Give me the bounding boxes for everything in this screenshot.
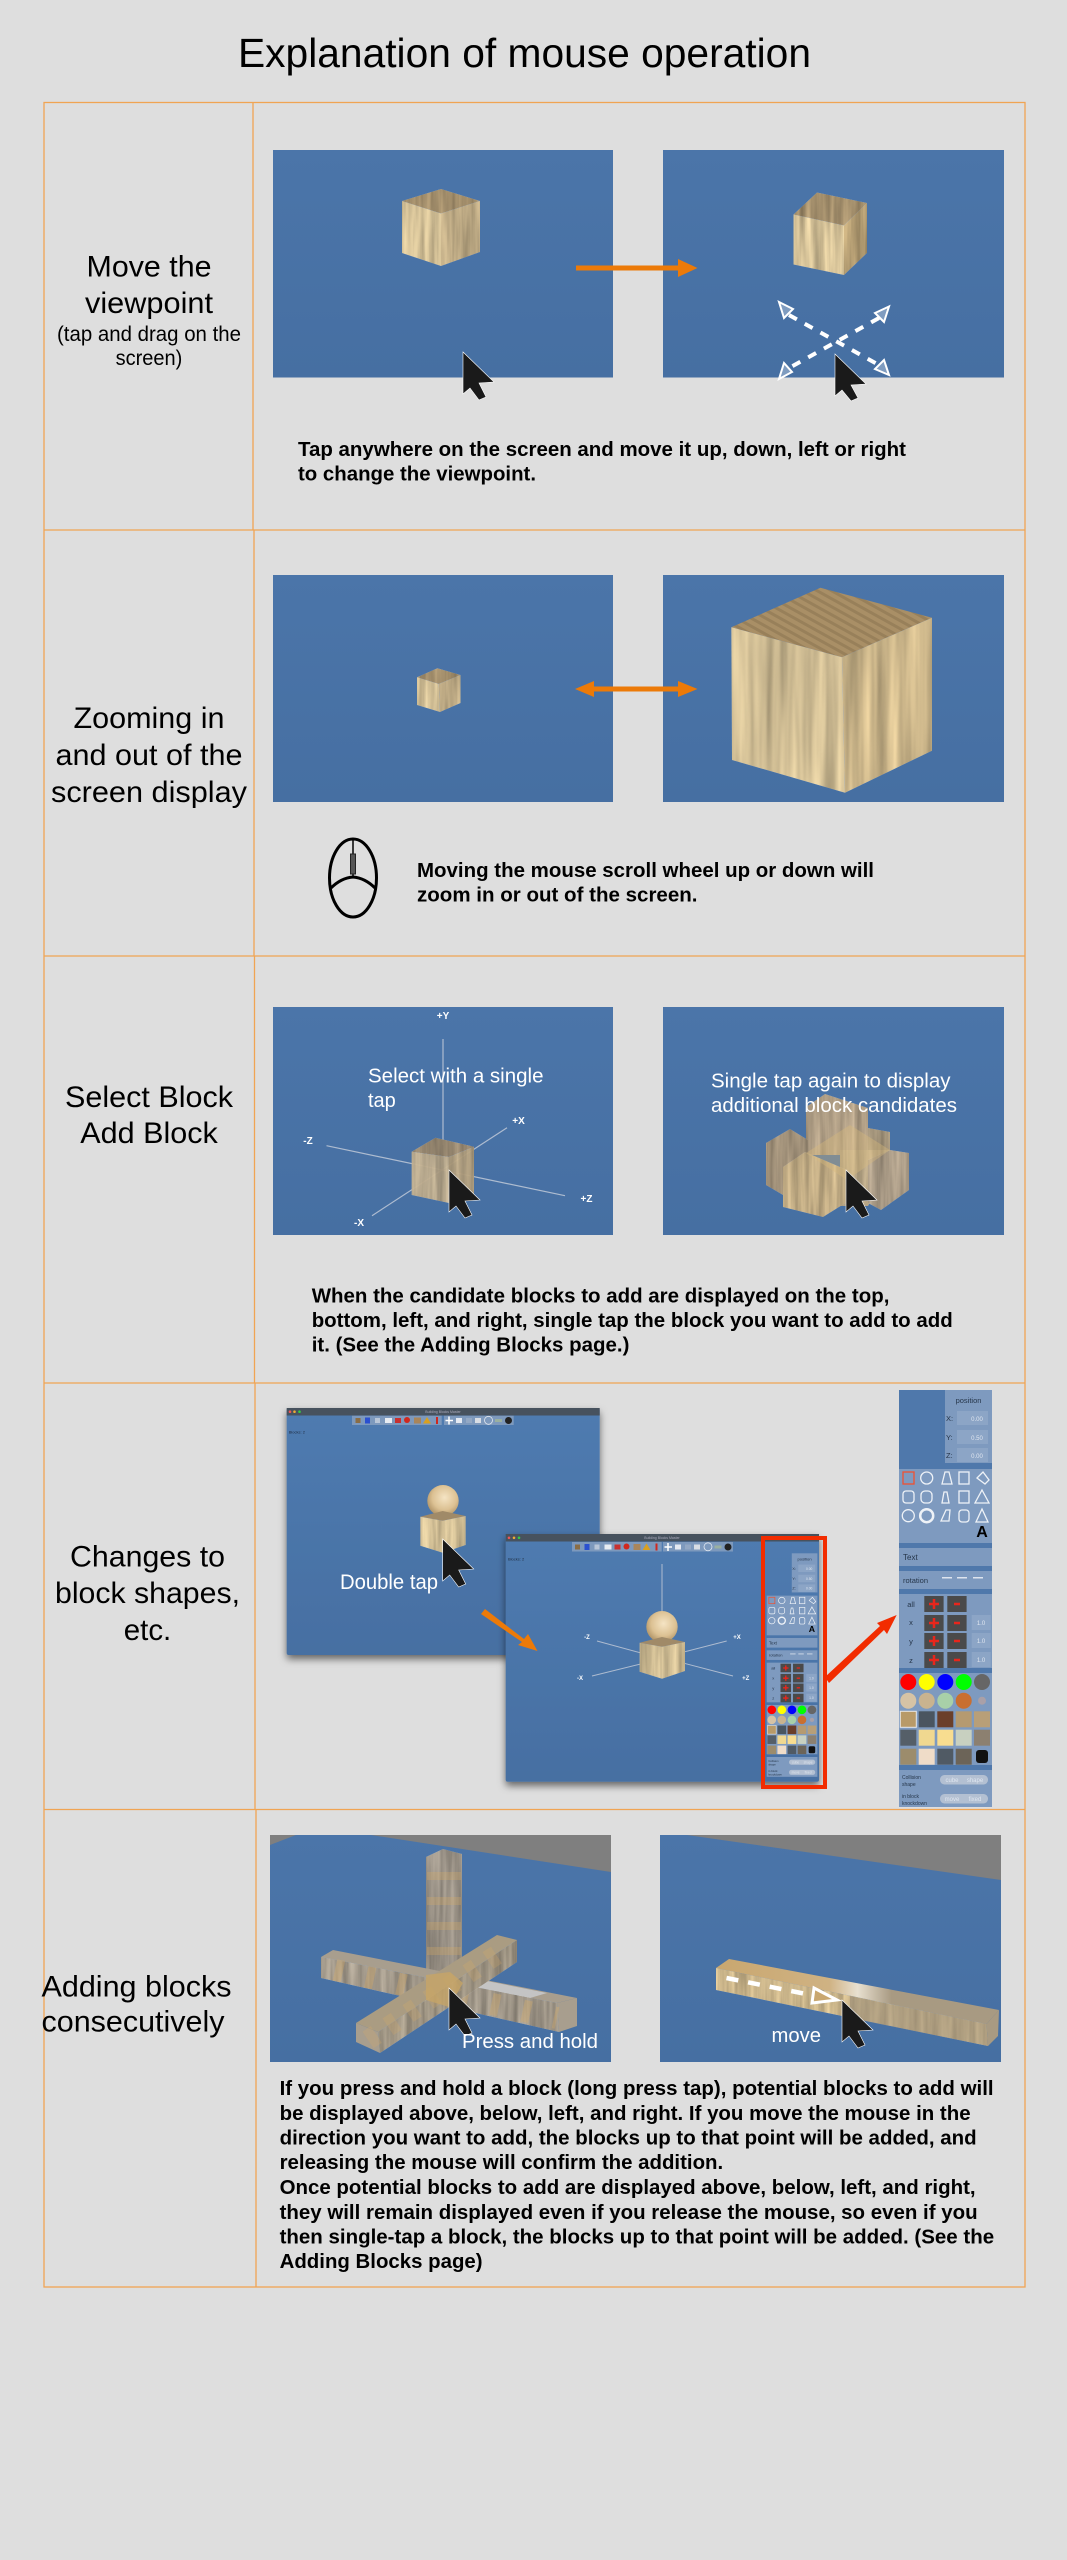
row 4 heading: changes to block shapes [55,1541,240,1647]
arrow: before to after [576,259,698,277]
icon: selected wood cube [412,1138,474,1203]
settings panel inset in window: rotation [769,1653,782,1658]
panel: move [660,1835,1001,2062]
window: shape editor screenshot [506,1534,819,1782]
row 5 description [280,2077,994,2273]
row 3 description [312,1285,953,1357]
row 2 heading: zooming: and out of the [56,739,242,772]
icon: candidate wood cubes [766,1094,909,1217]
row 3 heading: select and add block: Select Block [65,1081,234,1114]
panel: enlarged settings: cube [945,1778,959,1784]
icon: mouse cursor [835,354,866,401]
icon: mouse cursor [449,1988,480,2036]
row 1 heading: move the viewpoint [57,250,241,370]
row 2 description [417,859,874,907]
axes with labels: -X [354,1218,364,1229]
window: shape editor screenshot: Building Blocks Master [644,1536,681,1540]
arrow: zoom double arrow [575,681,698,697]
panel: viewpoint before [273,150,613,400]
panel: enlarged settings: 1.0 [977,1639,986,1645]
panel: enlarged settings: 1.0 [977,1621,986,1627]
axes with labels [303,1011,592,1229]
panel: enlarged settings [899,1390,992,1807]
icon: large wood cube [731,588,932,793]
label: single tap again: Single tap again to display [711,1071,950,1093]
toolbar [572,1542,733,1552]
panel: enlarged settings: 0.00 [971,1454,983,1460]
label: select with a single tap: Select with a single [368,1066,544,1088]
panel: enlarged settings: A [976,1524,988,1541]
axes with labels: +Y [437,1011,450,1022]
row 3 description: When the candidate blocks to add are displayed on the top, [312,1285,889,1308]
panel: enlarged settings: z [909,1656,913,1665]
toolbar [352,1416,514,1425]
panel: enlarged settings: 1.0 [977,1658,986,1664]
label: press and hold: Press and hold [462,2031,598,2053]
row 3 heading: select and add block: Add Block [80,1117,219,1150]
icon: wood ball on cube [420,1485,466,1553]
settings panel inset in window: shape [804,1760,813,1764]
panel: select block [273,1007,613,1235]
icon: wood cube [402,189,480,266]
window: double tap screenshot: Building Blocks Master [425,1410,462,1414]
row 4 heading: changes to block shapes: block shapes, [55,1577,240,1610]
row 5 description: be displayed above, below, left, and right. If you move the mouse in the [280,2102,971,2125]
panel: enlarged settings: y [909,1637,913,1646]
row 3 description: it. (See the Adding Blocks page.) [312,1334,629,1357]
settings panel inset in window: position [798,1556,812,1561]
axes [577,1564,750,1682]
panel: press and hold [270,1835,611,2062]
panel: enlarged settings: rotation [903,1576,928,1585]
row 5 description: Adding Blocks page) [280,2250,483,2273]
settings panel inset in window [767,1553,817,1777]
axes: -X [577,1676,583,1682]
label: blocks count: Blocks: 2 [508,1556,525,1562]
axes with labels: -Z [303,1136,313,1147]
arrow: orange window transition [481,1609,538,1651]
panel: zoomed out [273,575,613,802]
label: single tap again: additional block candidates [711,1095,957,1117]
panel: enlarged settings: shape [902,1782,916,1788]
panel: enlarged settings: move [945,1797,960,1803]
settings panel inset in window: fixed [805,1771,812,1775]
row 2 heading: zooming: screen display [51,776,247,809]
settings panel inset in window: 1.0 [809,1676,814,1680]
settings panel inset in window: Collision [768,1759,779,1763]
settings panel inset in window: Text [769,1640,778,1645]
row 1 heading: move the viewpoint: (tap and drag on the [57,322,241,346]
row 1 heading: move the viewpoint: Move the [86,250,212,284]
row 1 heading: move the viewpoint: viewpoint [85,287,214,320]
panel: viewpoint after [663,150,1004,401]
title: Explanation of mouse operation [238,30,811,76]
row 4 heading: changes to block shapes: Changes to [70,1541,225,1574]
row 2 heading: zooming [51,702,247,809]
label: blocks count: Blocks: 2 [289,1430,306,1434]
settings panel inset in window: Z: [792,1586,796,1591]
label: select with a single tap [368,1066,544,1112]
panel: enlarged settings: Collision [902,1775,921,1781]
panel: add block candidates [663,1007,1004,1235]
row 1 description: Tap anywhere on the screen and move it up, down, left or right [298,438,906,461]
icon: rotated wood cube [794,192,867,275]
label: single tap again [711,1071,957,1117]
icon: mouse cursor [842,2000,873,2048]
settings panel inset in window: 0.50 [806,1577,813,1581]
icon: wood ball on cube [640,1611,685,1679]
panel: enlarged settings: Z: [946,1451,953,1460]
row 2 description: Moving the mouse scroll wheel up or down will [417,859,874,882]
row 4 heading: changes to block shapes: etc. [124,1614,171,1647]
red highlight frame [763,1538,825,1787]
axes with labels: +Z [581,1194,592,1205]
panel: enlarged settings: in block [902,1794,919,1800]
panel: enlarged settings: shape [967,1778,984,1784]
settings panel inset in window: A [809,1624,815,1634]
settings panel inset in window: cube [792,1760,799,1764]
row 5 description: direction you want to add, the blocks up to that point will be added, and [280,2127,977,2150]
row 5 description: then single-tap a block, the blocks up to that point will be added. (See the [280,2226,994,2248]
settings panel inset in window: all [771,1666,775,1671]
row 5 heading: adding blocks consecutively [42,1971,232,2039]
panel: enlarged settings: fixed [969,1797,981,1803]
settings panel inset in window: in block [768,1769,778,1773]
label: double tap: Double tap [340,1570,438,1594]
panel: zoomed in [663,575,1004,802]
panel: enlarged settings: position [956,1396,981,1405]
row 3 description: bottom, left, and right, single tap the block you want to add to add [312,1309,953,1332]
settings panel inset in window: shape [768,1763,776,1767]
panel: enlarged settings: 0.50 [971,1436,983,1442]
icon: mouse cursor [443,1539,474,1587]
row 2 description: zoom in or out of the screen. [417,884,698,907]
settings panel inset in window: X: [792,1566,796,1571]
window: double tap screenshot [287,1408,600,1655]
icon: mouse cursor [449,1170,480,1218]
icon: candidate block bars [321,1849,577,2053]
settings panel inset in window: x [772,1675,774,1680]
panel: enlarged settings: 0.00 [971,1417,983,1423]
row 3 heading: select and add block [65,1081,234,1150]
settings panel inset in window: z [772,1696,774,1701]
settings panel inset in window: move [792,1771,800,1775]
arrow: red to enlarged panel [825,1615,897,1683]
icon: mouse cursor [846,1170,877,1218]
row 5 heading: adding blocks consecutively: consecutively [42,2006,225,2039]
row 1 description [298,438,906,486]
settings panel inset in window: 0.00 [806,1587,813,1591]
row 5 description: Once potential blocks to add are displayed above, below, left, and right, [280,2176,976,2199]
label: select with a single tap: tap [368,1090,396,1112]
icon: mouse cursor [463,352,494,400]
settings panel inset in window: knockdown [768,1773,782,1777]
panel: enlarged settings: knockdown [902,1801,927,1807]
settings panel inset in window: 1.0 [809,1696,814,1700]
settings panel inset in window: 0.00 [806,1567,813,1571]
panel: enlarged settings: Y: [946,1433,953,1442]
panel: enlarged settings: X: [946,1414,953,1423]
row 5 description: If you press and hold a block (long press tap), potential blocks to add will [280,2077,994,2100]
panel: enlarged settings: Text [903,1553,918,1562]
icon: dashed white arrow [726,1978,837,2003]
settings panel inset in window: Y: [792,1576,796,1581]
row 2 heading: zooming: Zooming in [74,702,224,735]
settings panel inset in window: y [772,1685,775,1690]
icon: dashed white direction arrows [779,302,889,379]
axes: +X [733,1635,741,1641]
axes: +Z [742,1676,750,1682]
icon: small wood cube [417,668,460,712]
panel: enlarged settings: all [907,1600,915,1609]
row 1 description: to change the viewpoint. [298,462,536,486]
row 5 description: releasing the mouse will confirm the addition. [280,2151,723,2174]
settings panel inset in window: 1.0 [809,1686,814,1690]
row 5 heading: adding blocks consecutively: Adding blocks [42,1971,232,2004]
row 5 description: they will remain displayed even if you release the mouse, so even if you [280,2201,978,2224]
icon: added block bar [716,1959,999,2046]
axes: -Z [584,1635,590,1641]
row 1 heading: move the viewpoint: screen) [116,346,182,370]
panel: enlarged settings: x [909,1618,913,1627]
axes with labels: +X [512,1116,525,1127]
icon: mouse scroll wheel [330,839,376,917]
label: move: move [772,2025,821,2047]
table grid [44,102,1025,2287]
